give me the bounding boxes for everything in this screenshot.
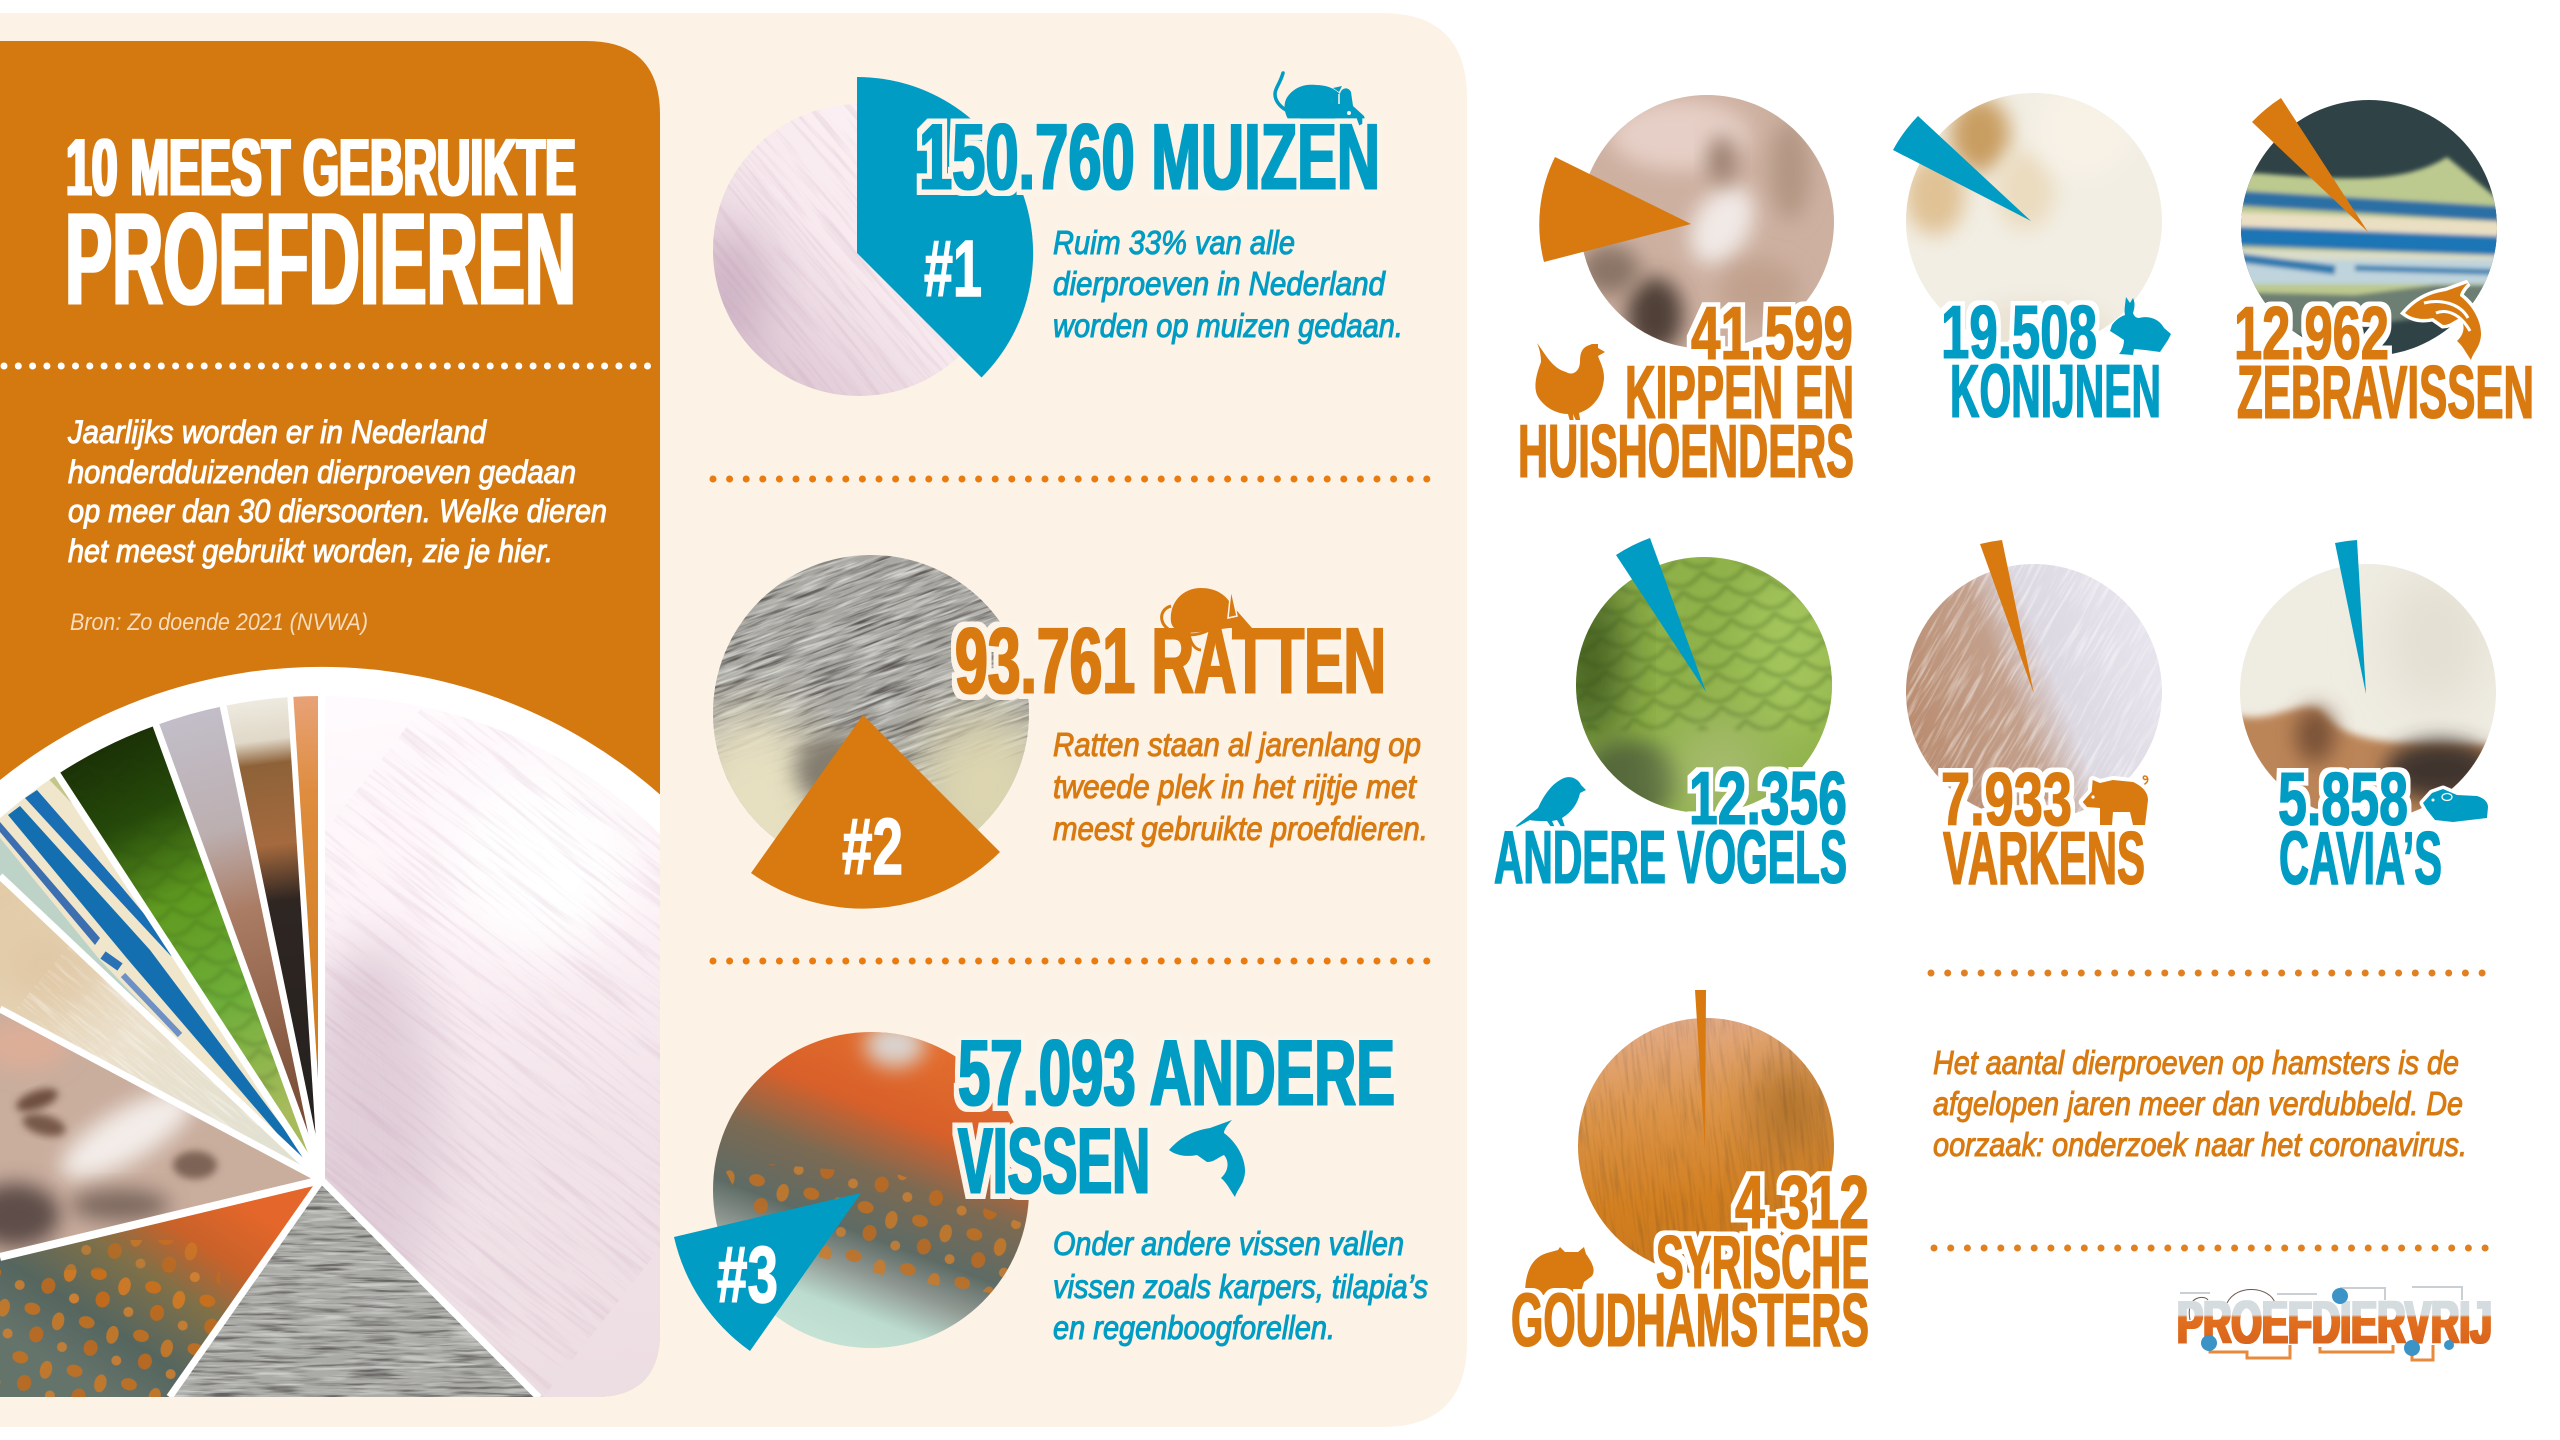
number: 5.858 [2278, 757, 2408, 841]
title: PROEFDIEREN [65, 185, 576, 332]
pie wedge [1980, 540, 2034, 694]
panel: varkens [1829, 415, 2331, 965]
background: cream panel [0, 13, 1467, 1427]
number: 19.508 [1941, 290, 2097, 374]
pie wedge [1695, 990, 1706, 1150]
description: dierproeven in Nederland [1053, 265, 1386, 302]
description: en regenboogforellen. [1053, 1309, 1335, 1346]
pie wedge #3 [674, 1193, 861, 1351]
pie slice: kippen [0, 1013, 311, 1253]
pie wedge [1893, 116, 2031, 221]
panel background: orange [0, 41, 660, 1397]
pie slice: syrische goudhamsters [293, 696, 318, 1078]
label: VARKENS [1943, 816, 2145, 900]
number: 12.962 [2234, 291, 2389, 375]
description: tweede plek in het rijtje met [1053, 768, 1418, 805]
intro text: Jaarlijks worden er in Nederland [67, 414, 487, 450]
rank label #3: #3 [717, 1230, 778, 1319]
callout: hamsters: Het aantal dierproeven op hamsters is de [1933, 1044, 2459, 1081]
photo circle: hamster fur [1551, 906, 1858, 1391]
title [65, 123, 576, 332]
pie wedge #2 [751, 715, 1000, 909]
pie slice: andere vissen [0, 1186, 313, 1397]
photo circle: pig skin [1829, 415, 2331, 965]
description: vissen zoals karpers, tilapia’s [1053, 1268, 1428, 1305]
pie wedge #1 [857, 77, 1033, 378]
rank 3: andere vissen [674, 1020, 1428, 1351]
label: GOUDHAMSTERS [1511, 1278, 1869, 1362]
number: 41.599 [1691, 291, 1853, 375]
pie slice: cavia's [226, 697, 316, 1136]
description: worden op muizen gedaan. [1053, 307, 1403, 344]
rank label #2: #2 [842, 802, 903, 891]
pie slice: andere vogels [60, 726, 308, 1153]
photo circle: zebrafish stripes [2235, 95, 2505, 360]
number: 4.312 [1735, 1160, 1869, 1244]
pie slice: ratten [174, 1186, 534, 1397]
number: 12.356 [1689, 756, 1847, 840]
icon: mouse [1275, 73, 1366, 126]
label: SYRISCHE [1656, 1220, 1869, 1304]
description [1053, 1225, 1428, 1346]
pie wedge [1539, 157, 1691, 262]
pie slice: zebravissen [0, 776, 303, 1158]
icon: fish [1169, 1120, 1245, 1197]
pie slice: konijnen [0, 881, 300, 1165]
photo circle: chicken feathers [1575, 90, 1845, 355]
description: meest gebruikte proefdieren. [1053, 810, 1428, 847]
label: HUISHOENDERS [1518, 409, 1854, 493]
title: 10 MEEST GEBRUIKTE [66, 123, 576, 213]
icon: zebrafish [2405, 283, 2481, 360]
icon: chicken [1535, 343, 1605, 425]
heading: 150.760 muizen: 150.760 MUIZEN [919, 104, 1380, 209]
description: Ratten staan al jarenlang op [1053, 726, 1421, 763]
number: 7.933 [1941, 757, 2072, 841]
pie wedge [1616, 538, 1706, 692]
icon: pig [2083, 776, 2148, 825]
panel: syrische goudhamsters [1511, 906, 1869, 1391]
intro text: het meest gebruikt worden, zie je hier. [68, 533, 553, 569]
pie slice: varkens [159, 707, 308, 1134]
panel: top three animals [674, 71, 1430, 1351]
panel: andere vogels [1494, 538, 1847, 899]
label: ANDERE VOGELS [1494, 815, 1847, 899]
description [1053, 224, 1403, 344]
label: KONIJNEN [1950, 349, 2161, 433]
photo circle: rabbit fur [1900, 80, 2170, 360]
rank label #1: #1 [924, 224, 982, 313]
label [1511, 1220, 1869, 1362]
panel: intro with pie chart [0, 41, 660, 1397]
icon: guinea pig [2423, 789, 2488, 822]
pie wedge [2335, 540, 2366, 694]
panel: zebravissen [2234, 95, 2534, 434]
description: Onder andere vissen vallen [1053, 1225, 1404, 1262]
label [1518, 350, 1854, 493]
icon: hamster [1525, 1247, 1594, 1295]
panel: kippen en huishoenders [1518, 90, 1854, 493]
photo circle: mouse fur [713, 104, 960, 396]
heading: 57.093 andere vissen: 57.093 ANDERE [958, 1020, 1395, 1125]
icon: rabbit [2110, 297, 2171, 355]
callout: hamsters: oorzaak: onderzoek naar het coronavirus. [1933, 1126, 2467, 1163]
label: KIPPEN EN [1625, 350, 1854, 434]
callout: hamsters: afgelopen jaren meer dan verdubbeld. De [1933, 1085, 2463, 1122]
photo circle: fish scales [710, 1023, 1040, 1350]
rank 2: ratten [713, 555, 1425, 909]
intro text: honderdduizenden dierproeven gedaan [68, 454, 576, 490]
icon: rat [1162, 588, 1252, 650]
intro text: op meer dan 30 diersoorten. Welke dieren [68, 493, 607, 529]
panel: konijnen [1893, 80, 2171, 433]
description: Ruim 33% van alle [1053, 224, 1295, 261]
pie slice: muizen [325, 709, 660, 1397]
photo circle: guinea pig fur [2235, 560, 2505, 830]
intro text [67, 414, 607, 569]
heading: 93.761 ratten: 93.761 RATTEN [955, 608, 1386, 713]
photo circle: green feathers [1560, 550, 1845, 820]
heading: 57.093 andere vissen: VISSEN [958, 1108, 1150, 1213]
pie wedge [2252, 98, 2368, 232]
heading: 57.093 andere vissen [958, 1020, 1395, 1213]
panel: cavia's [2235, 540, 2505, 900]
icon: bird [1511, 777, 1586, 830]
source note: Bron: Zo doende 2021 (NVWA) [70, 609, 368, 636]
rank 1: muizen [713, 71, 1400, 396]
photo circle: rat fur [599, 411, 1141, 930]
pie chart of animal textures [0, 666, 660, 1397]
callout: hamsters [1933, 1044, 2467, 1163]
description [1053, 726, 1428, 847]
